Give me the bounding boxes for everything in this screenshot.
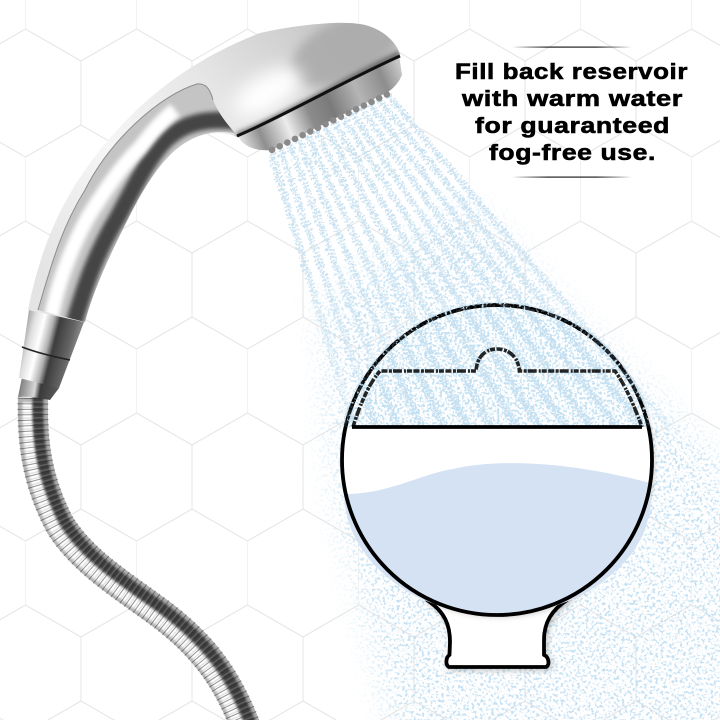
spray scatter droplets	[290, 170, 720, 720]
upper dome shade	[288, 22, 396, 90]
hose light ribs	[33, 398, 247, 720]
spray streams	[270, 95, 674, 431]
tube base	[38, 84, 235, 322]
tube highlight	[50, 110, 175, 325]
rim shadow	[237, 54, 400, 136]
magnified reservoir diagram	[340, 302, 657, 674]
water level	[344, 463, 651, 614]
top rule	[512, 46, 632, 48]
tube edge	[38, 84, 213, 310]
diagonal streaks	[345, 302, 647, 427]
speckled circle arc over spray	[346, 305, 648, 427]
dome highlight	[232, 60, 310, 120]
dense droplets	[335, 295, 660, 427]
head face collar	[237, 55, 402, 150]
handle tube	[38, 84, 236, 322]
tube dark band	[72, 120, 240, 330]
reservoir neck	[427, 590, 567, 667]
line 2: with warm water	[461, 86, 683, 111]
shower head	[28, 22, 402, 322]
flexible hose	[28, 395, 252, 720]
collar ring	[22, 347, 70, 360]
handle collar	[19, 310, 84, 388]
line 4: fog-free use.	[489, 140, 656, 165]
reservoir circle	[342, 305, 652, 615]
head shell shading	[232, 22, 400, 137]
reservoir baseline	[352, 425, 642, 429]
water spray	[270, 95, 720, 720]
spray passing over upper circle	[342, 302, 652, 427]
rim groove	[237, 56, 400, 136]
head shell	[28, 23, 400, 322]
hose dark ribs	[33, 398, 247, 720]
tube lower reflection	[90, 142, 200, 325]
hose body	[33, 398, 247, 720]
reservoir lid outline	[353, 349, 642, 427]
circle outline	[342, 305, 652, 615]
hose highlight	[28, 402, 242, 720]
line 3: for guaranteed	[475, 113, 670, 138]
hose shadow	[38, 395, 252, 720]
callout text	[455, 46, 688, 178]
wobbling droplet lines	[270, 95, 674, 431]
bottom rule	[512, 176, 632, 178]
handle nut	[18, 377, 59, 400]
nozzles	[272, 93, 390, 150]
line 1: Fill back reservoir	[455, 59, 688, 84]
